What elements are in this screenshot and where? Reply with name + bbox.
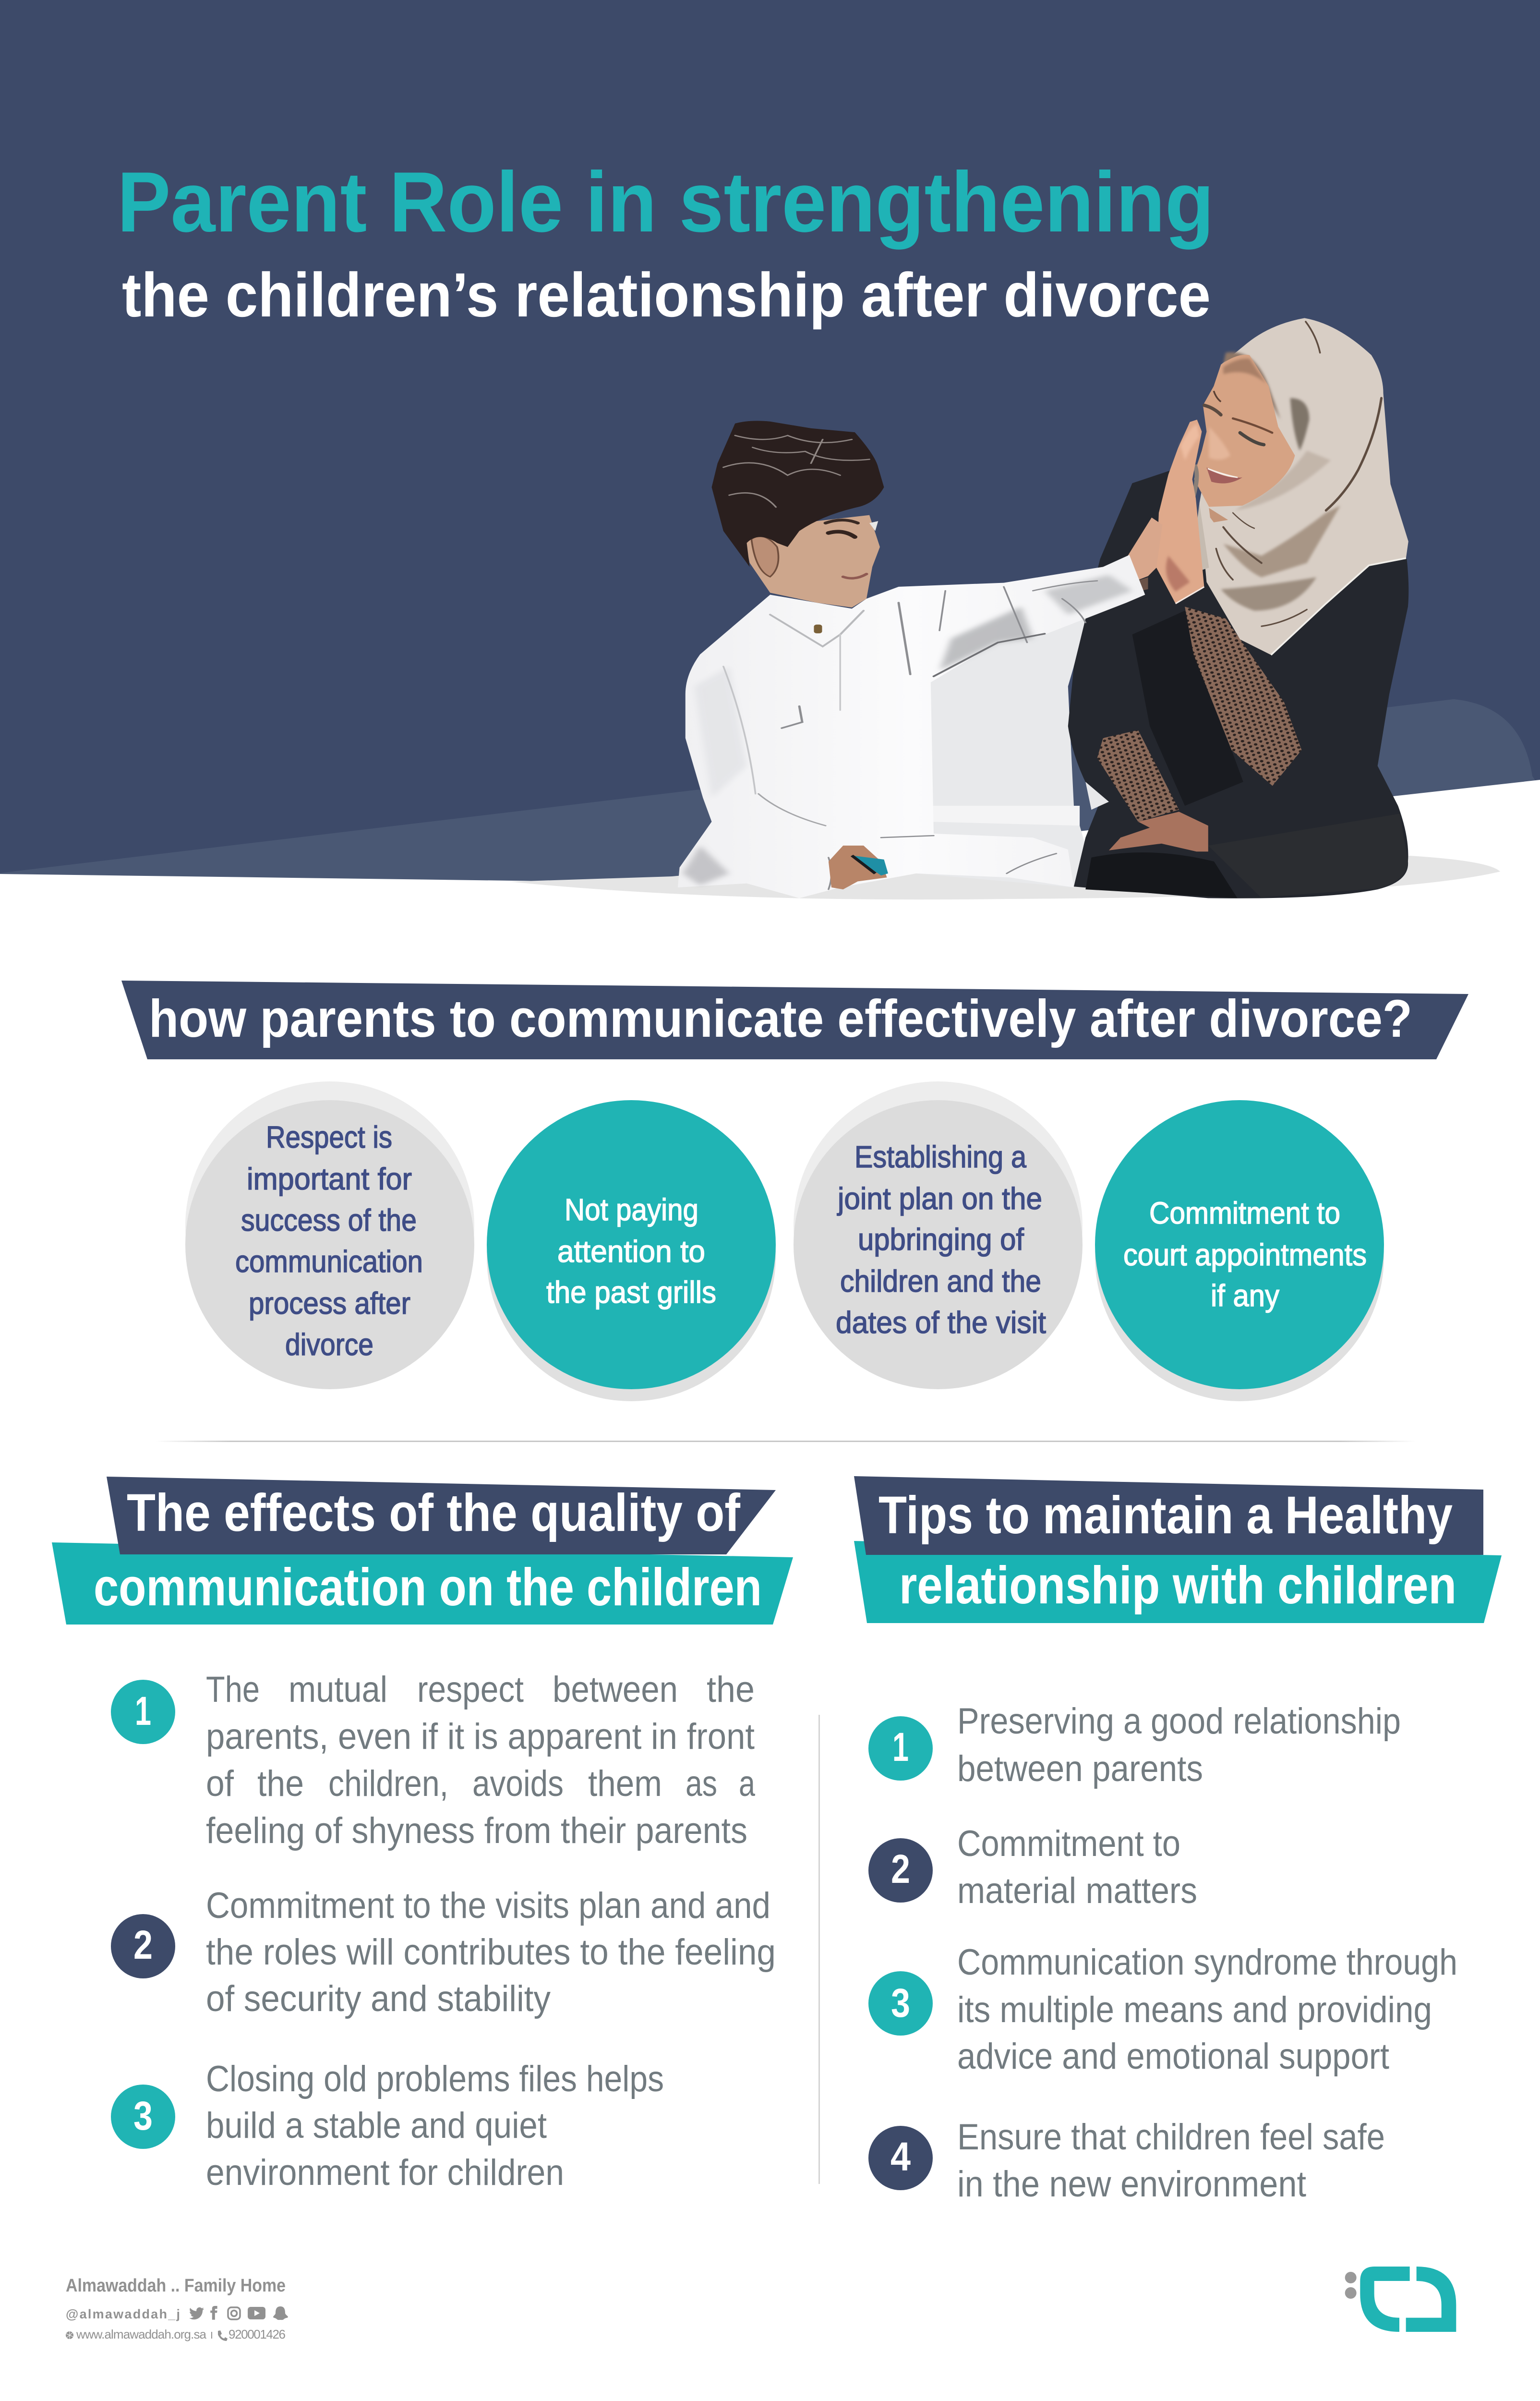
mother body <box>916 471 1408 898</box>
head <box>744 515 880 607</box>
circle: joint plan: upbringing of <box>858 1222 1024 1257</box>
banner: tips: Tips to maintain a Healthy <box>878 1486 1453 1545</box>
banner: tips: relationship with children <box>899 1556 1456 1615</box>
circle: respect: Respect is <box>266 1120 392 1154</box>
circle: court appointments <box>1095 1100 1384 1401</box>
section heading: how parents communicate: how parents to communicate effectively after divorce? <box>149 989 1412 1048</box>
item text: children, <box>328 1763 448 1804</box>
circle: respect <box>185 1081 474 1389</box>
left item 2: of security and stability <box>206 1978 551 2019</box>
right item 3: 3 <box>891 1980 910 2025</box>
item text: parents, even if it is apparent in front <box>206 1716 755 1757</box>
right item 3: Communication syndrome through <box>957 1942 1457 1983</box>
circle: court appointments: court appointments <box>1123 1237 1367 1272</box>
footer contact block: Almawaddah .. Family Home <box>66 2276 286 2296</box>
item text: the <box>707 1669 755 1710</box>
logo <box>1345 2267 1456 2332</box>
right item 4: in the new environment <box>957 2164 1306 2205</box>
item text: feeling of shyness from their parents <box>206 1810 747 1851</box>
circle: joint plan: Establishing a <box>854 1140 1026 1174</box>
right item 3: advice and emotional support <box>957 2036 1389 2077</box>
right item 2: 2 <box>891 1846 910 1892</box>
footer contact block: @almawaddah_j <box>66 2307 180 2321</box>
right item 2: material matters <box>957 1870 1197 1911</box>
right item 4: 4 <box>890 2134 911 2179</box>
banner: effects of quality: The effects of the quality of <box>127 1483 740 1542</box>
footer contact block: www.almawaddah.org.sa <box>76 2327 207 2341</box>
left item 2: the roles will contributes to the feeling <box>206 1932 776 1973</box>
icon: youtube <box>248 2307 265 2319</box>
title: the children’s relationship after divorce <box>122 260 1211 330</box>
item text: a <box>739 1763 756 1804</box>
banner: tips <box>854 1476 1502 1623</box>
lace sleeves <box>1185 606 1301 786</box>
left item 1 <box>111 1669 756 1851</box>
right item 1: Preserving a good relationship <box>957 1701 1401 1742</box>
right item 3 <box>868 1942 1457 2077</box>
left item 3: 3 <box>133 2093 153 2138</box>
icon: facebook <box>210 2306 217 2320</box>
item text: as <box>686 1763 717 1804</box>
left item 3: build a stable and quiet <box>206 2105 547 2146</box>
circle: court appointments: Commitment to <box>1149 1196 1340 1230</box>
icon: globe <box>66 2331 73 2339</box>
item text: them <box>588 1763 662 1804</box>
icon: twitter <box>189 2307 204 2319</box>
title: Parent Role in strengthening <box>117 154 1214 250</box>
title <box>117 154 1214 330</box>
circle: respect: communication <box>235 1244 423 1279</box>
photo: boy and mother high five <box>509 318 1500 899</box>
circle: past grills: the past grills <box>546 1275 716 1310</box>
left item 2: 2 <box>133 1922 153 1967</box>
item text: The <box>206 1669 260 1710</box>
ground shadow <box>509 850 1500 899</box>
right item 1 <box>868 1701 1401 1789</box>
circle: past grills: Not paying <box>565 1192 698 1227</box>
circle: court appointments: if any <box>1211 1278 1279 1313</box>
item text: of <box>206 1763 234 1804</box>
circle: past grills <box>487 1100 776 1401</box>
left item 3: Closing old problems files helps <box>206 2059 664 2099</box>
right item 1: 1 <box>892 1724 909 1770</box>
mother head and hijab <box>1127 318 1408 655</box>
boy <box>678 421 1145 898</box>
right item 4 <box>868 2117 1385 2205</box>
circle: respect: divorce <box>285 1327 373 1362</box>
icon: phone <box>218 2330 228 2341</box>
item text: the <box>257 1763 304 1804</box>
mother hand <box>1156 420 1204 604</box>
item text: respect <box>417 1669 524 1710</box>
left item 3 <box>111 2059 664 2193</box>
icon: instagram <box>228 2307 240 2319</box>
circle: joint plan: dates of the visit <box>836 1305 1046 1340</box>
right item 1: between parents <box>957 1748 1203 1789</box>
banner: effects of quality: communication on the children <box>94 1558 762 1617</box>
banner: effects of quality <box>52 1477 793 1625</box>
item text: between <box>553 1669 678 1710</box>
left item 3: environment for children <box>206 2152 564 2193</box>
footer contact block <box>66 2276 288 2341</box>
item text: mutual <box>289 1669 387 1710</box>
item text: avoids <box>472 1763 564 1804</box>
icon: snapchat <box>273 2306 288 2320</box>
right item 4: Ensure that children feel safe <box>957 2117 1385 2158</box>
right item 2 <box>868 1823 1197 1911</box>
boy hand and phone <box>829 846 887 889</box>
sleeve shading <box>683 575 1132 885</box>
footer contact block: 920001426 <box>229 2327 286 2341</box>
header background <box>0 0 1540 912</box>
circle: joint plan: joint plan on the <box>837 1181 1042 1216</box>
right item 2: Commitment to <box>957 1823 1180 1864</box>
item text <box>206 1669 756 1851</box>
left item 1: 1 <box>135 1688 151 1734</box>
circle: respect: important for <box>247 1162 412 1196</box>
left item 2 <box>111 1885 776 2019</box>
circle: respect: process after <box>249 1286 410 1321</box>
left item 2: Commitment to the visits plan and and <box>206 1885 770 1926</box>
boy hand <box>1127 518 1162 582</box>
circle: respect: success of the <box>241 1203 417 1237</box>
face <box>1194 355 1295 507</box>
circle: joint plan <box>794 1081 1083 1389</box>
circle: past grills: attention to <box>557 1234 705 1269</box>
right item 3: its multiple means and providing <box>957 1989 1432 2030</box>
robe <box>678 555 1145 898</box>
circle: joint plan: children and the <box>840 1264 1041 1298</box>
